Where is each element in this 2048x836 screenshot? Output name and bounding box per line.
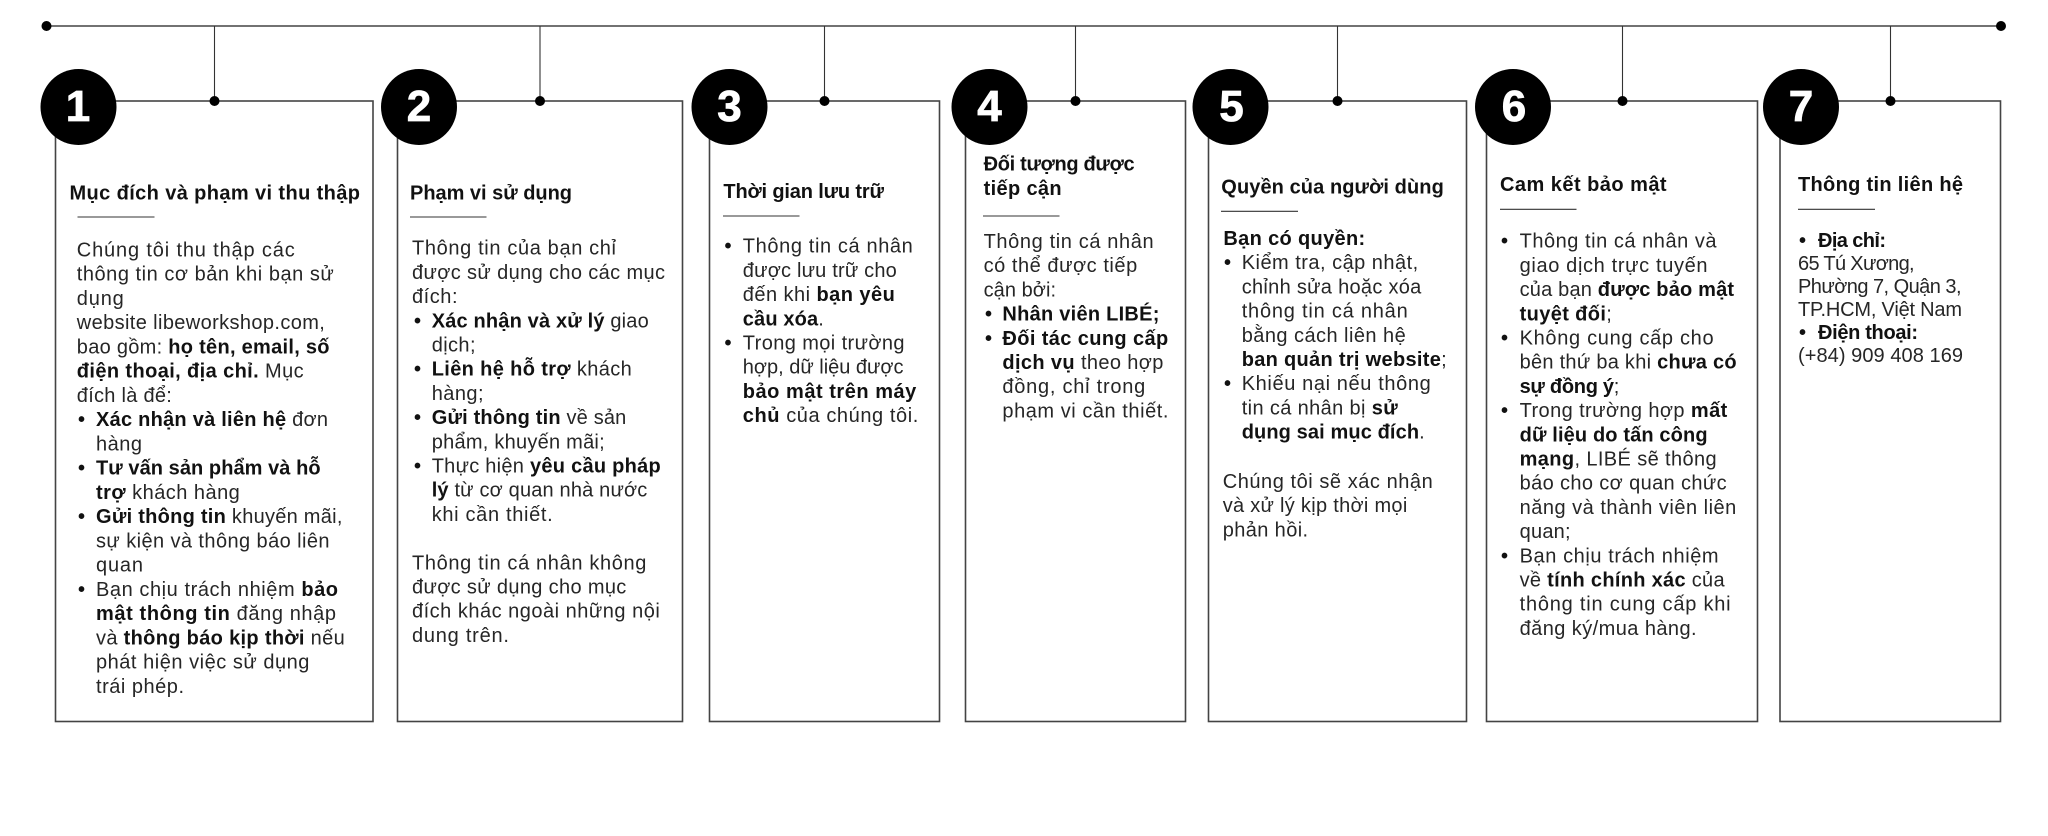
panel 4 body text: Nhân viên LIBÉ; (1002, 303, 1159, 326)
panel 7 body text: (+84) 909 408 169 (1798, 345, 1963, 367)
panel 2 body text: • (414, 359, 421, 381)
panel 7 connector (1886, 26, 1896, 106)
panel 2 body text: đích: (412, 286, 458, 308)
panel 2 body text: hàng; (432, 383, 484, 405)
panel 7 number badge: 7 (1789, 82, 1813, 131)
panel 4 body text: cận bởi: (984, 279, 1056, 301)
panel 1 body text: • (78, 506, 85, 528)
panel 2 body text: • (414, 310, 421, 332)
panel 6 connector (1618, 26, 1628, 106)
panel 6 body text: sự đồng ý; (1520, 376, 1619, 398)
panel 1 body text: sự kiện và thông báo liên (96, 530, 330, 552)
panel 1 body text: đích là để: (77, 385, 172, 407)
panel 2 body text: Thực hiện yêu cầu pháp (432, 456, 661, 478)
panel 5 heading: Quyền của người dùng (1221, 176, 1444, 198)
panel 7: contact information (1763, 26, 2000, 722)
panel 1 body text: trái phép. (96, 676, 184, 698)
panel 4 heading: tiếp cận (984, 178, 1062, 200)
panel 1 body text: và thông báo kịp thời nếu (96, 628, 345, 650)
panel 1: purpose and scope (40, 26, 373, 722)
panel 5 body text: thông tin cá nhân (1242, 301, 1408, 323)
panel 6 body text: bên thứ ba khi chưa có (1520, 352, 1737, 374)
panel 4 body text: dịch vụ theo hợp (1002, 352, 1163, 374)
panel 6 body text: • (1501, 328, 1508, 350)
panel 6 heading: Cam kết bảo mật (1500, 174, 1667, 196)
panel 3 frame (710, 101, 940, 722)
panel 2 connector (535, 26, 545, 106)
panel 2 frame (398, 101, 682, 722)
panel 2 body text: khi cần thiết. (432, 504, 553, 526)
panel 1 body text: Bạn chịu trách nhiệm bảo (96, 579, 338, 601)
panel 7 body text: TP.HCM, Việt Nam (1798, 299, 1962, 321)
panel 6 body text: đăng ký/mua hàng. (1520, 618, 1697, 640)
panel 5 body text: Kiểm tra, cập nhật, (1242, 252, 1418, 274)
panel 2 body text: Liên hệ hỗ trợ khách (432, 357, 632, 381)
panel 1 body text: thông tin cơ bản khi bạn sử (77, 264, 334, 286)
panel 1 body text: • (78, 409, 85, 431)
panel 4 body text: • (985, 304, 992, 326)
panel 4 number badge (952, 69, 1028, 145)
panel 6 body text: năng và thành viên liên (1520, 497, 1736, 519)
panel 6 number badge (1475, 69, 1551, 145)
panel 7 body text: 65 Tú Xương, (1798, 253, 1915, 275)
panel 5 connector (1332, 26, 1342, 106)
panel 6 frame (1486, 101, 1758, 722)
panel 3 connector (820, 26, 830, 106)
panel 6 body text: của bạn được bảo mật (1520, 279, 1734, 301)
panel 2 body text: Xác nhận và xử lý giao (432, 310, 649, 332)
panel 5 body text: tin cá nhân bị sử (1242, 397, 1398, 419)
panel 1 body text: bao gồm: họ tên, email, số (77, 336, 330, 358)
panel 5 body text: ban quản trị website; (1242, 349, 1447, 371)
panel 2 body text: lý từ cơ quan nhà nước (432, 480, 647, 502)
panel 1 body text: dụng (77, 288, 124, 310)
panel 4 heading (984, 154, 1135, 200)
panel 1 body text: mật thông tin đăng nhập (96, 603, 336, 625)
panel 6 body text: về tính chính xác của (1520, 570, 1725, 592)
panel 7 body text: Điện thoại: (1818, 322, 1918, 344)
panel 7 body text: • (1799, 322, 1806, 344)
panel 6 body text: báo cho cơ quan chức (1520, 473, 1727, 495)
panel 7 number badge (1763, 69, 1839, 145)
panel 2 body text: Gửi thông tin về sản (432, 407, 626, 429)
panel 6 body text: Không cung cấp cho (1520, 328, 1714, 350)
panel 7 body text: • (1799, 230, 1806, 252)
panel 6 body text: Thông tin cá nhân và (1520, 231, 1717, 253)
panel 1 connector (210, 26, 220, 106)
panel 5 body text: Khiếu nại nếu thông (1242, 373, 1431, 395)
panel 6 body text: • (1501, 545, 1508, 567)
panel 1 body text: • (78, 458, 85, 480)
panel 5 body text: • (1224, 252, 1231, 274)
panel 4 connector (1070, 26, 1080, 106)
panel 6 body text: Bạn chịu trách nhiệm (1520, 545, 1719, 567)
panel 5 body text: Bạn có quyền: (1223, 228, 1365, 250)
panel 2 body text: được sử dụng cho các mục (412, 262, 665, 284)
panel 5 body text: • (1224, 373, 1231, 395)
panel 2: scope of use (381, 26, 682, 722)
panel 5 body text: và xử lý kịp thời mọi (1223, 495, 1407, 517)
panel 4 body text: phạm vi cần thiết. (1002, 400, 1168, 422)
panel 3 body text: Thông tin cá nhân (743, 236, 913, 258)
panel 5 body text: chỉnh sửa hoặc xóa (1242, 276, 1422, 298)
panel 7 body text: Phường 7, Quận 3, (1798, 276, 1962, 298)
panel 6 body text: tuyệt đối; (1520, 303, 1612, 325)
panel 5 body text (1223, 228, 1447, 541)
panel 6 body text: mạng, LIBÉ sẽ thông (1520, 448, 1717, 470)
panel 2 body text: dịch; (432, 334, 476, 356)
panel 1 body text: Chúng tôi thu thập các (77, 240, 295, 262)
panel 3 body text: bảo mật trên máy (743, 381, 917, 403)
panel 5: user rights (1192, 26, 1466, 722)
panel 3 body text: Trong mọi trường (743, 332, 904, 354)
panel 6 body text: Trong trường hợp mất (1520, 400, 1728, 422)
panel 6 body text: • (1501, 231, 1508, 253)
panel 4 body text: Thông tin cá nhân (984, 231, 1154, 253)
panel 4 body text: • (985, 328, 992, 350)
panel 5 frame (1208, 101, 1466, 722)
panel 2 body text: được sử dụng cho mục (412, 576, 626, 598)
panel 3 body text: • (724, 332, 732, 354)
panel 1 body text (76, 240, 345, 698)
panel 3 body text: cầu xóa. (743, 308, 824, 330)
panel 3 body text: hợp, dữ liệu được (743, 357, 904, 379)
panel 7 heading: Thông tin liên hệ (1798, 174, 1963, 196)
panel 3 body text (724, 236, 918, 427)
panel 3: retention period (692, 26, 940, 722)
panel 2 body text: Thông tin cá nhân không (412, 552, 646, 574)
panel 1 heading: Mục đích và phạm vi thu thập (70, 182, 360, 204)
panel 5 body text: bằng cách liên hệ (1242, 324, 1406, 347)
panel 5 body text: phản hồi. (1223, 519, 1308, 541)
panel 4: who can access (952, 26, 1186, 722)
panel 4 heading: Đối tượng được (984, 154, 1135, 176)
panel 6 body text: thông tin cung cấp khi (1520, 594, 1731, 616)
panel 1 body text: website libeworkshop.com, (76, 312, 325, 334)
panel 1 frame (56, 101, 373, 722)
panel 1 body text: điện thoại, địa chỉ. Mục (77, 361, 304, 383)
panel 1 number badge: 1 (66, 82, 90, 131)
panel 2 number badge: 2 (407, 82, 431, 131)
panel 6 body text: dữ liệu do tấn công (1520, 424, 1708, 446)
panel 4 body text: đồng, chỉ trong (1002, 376, 1145, 398)
panel 1 body text: • (78, 579, 85, 601)
panel 4 body text (984, 231, 1168, 422)
panel 4 body text: Đối tác cung cấp (1002, 328, 1168, 350)
panel 7 body text: Địa chỉ: (1818, 230, 1886, 252)
panel 1 body text: Tư vấn sản phẩm và hỗ (96, 456, 321, 480)
panel 6 body text: • (1501, 400, 1508, 422)
panel 2 body text: dung trên. (412, 625, 509, 647)
panel 1 body text: trợ khách hàng (96, 482, 240, 504)
top timeline rail (42, 21, 2006, 31)
panel 3 body text: đến khi bạn yêu (743, 284, 895, 306)
panel 2 body text: • (414, 407, 421, 429)
panel 2 body text: Thông tin của bạn chỉ (412, 238, 617, 260)
panel 1 body text: hàng (96, 434, 142, 456)
panel 6 number badge: 6 (1502, 82, 1526, 131)
panel 5 number badge: 5 (1219, 82, 1244, 131)
panel 1 number badge (40, 69, 116, 145)
panel 5 body text: Chúng tôi sẽ xác nhận (1223, 471, 1433, 493)
panel 5 body text: dụng sai mục đích. (1242, 422, 1425, 444)
panel 3 heading: Thời gian lưu trữ (723, 181, 885, 203)
panel 2 body text (412, 238, 665, 647)
panel 5 number badge (1192, 69, 1268, 145)
panel 1 body text: Xác nhận và liên hệ đơn (96, 409, 328, 431)
panel 3 number badge (692, 69, 768, 145)
panel 6 body text (1501, 231, 1737, 640)
panel 2 heading: Phạm vi sử dụng (410, 182, 572, 204)
panel 2 body text: đích khác ngoài những nội (412, 601, 660, 623)
panel 3 body text: • (724, 236, 732, 258)
panel 6 body text: giao dịch trực tuyến (1520, 255, 1708, 277)
panel 3 body text: được lưu trữ cho (743, 260, 897, 282)
panel 4 frame (966, 101, 1186, 722)
panel 4 number badge: 4 (977, 82, 1002, 131)
panel 6 body text: quan; (1520, 521, 1571, 543)
panel 6: security commitment (1475, 26, 1758, 722)
panel 1 body text: phát hiện việc sử dụng (96, 652, 309, 674)
panel 1 body text: Gửi thông tin khuyến mãi, (96, 506, 342, 528)
panel 4 body text: có thể được tiếp (984, 255, 1137, 277)
panel 3 number badge: 3 (717, 82, 742, 131)
panel 2 number badge (381, 69, 457, 145)
panel 1 body text: quan (96, 555, 143, 577)
panel 2 body text: phẩm, khuyến mãi; (432, 431, 605, 453)
panel 7 body text (1798, 230, 1963, 367)
panel 2 body text: • (414, 456, 421, 478)
panel 7 frame (1780, 101, 2000, 722)
panel 3 body text: chủ của chúng tôi. (743, 405, 918, 427)
